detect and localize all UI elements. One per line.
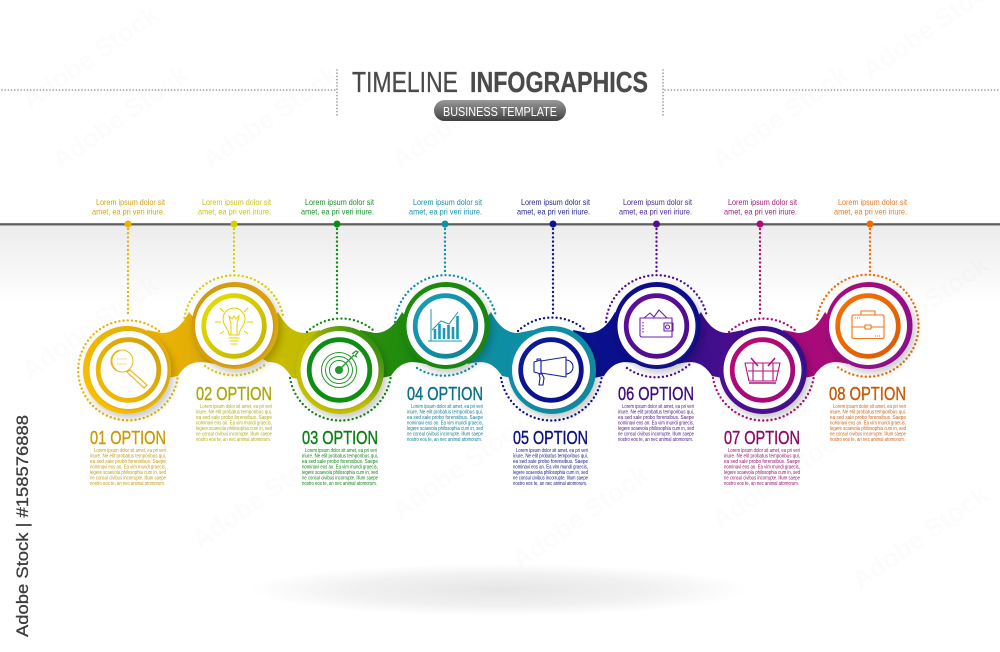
header: title block — [2, 67, 1000, 121]
top caption 02: amet, ea pri veri iriure. — [198, 206, 271, 216]
description 05: ne consul civibus incorrupte. Illum saepe — [513, 476, 588, 482]
top caption 02: Lorem ipsum dolor sit — [202, 197, 272, 207]
description 05: nostro eos te, an nec animal atomorum. — [513, 481, 587, 487]
title 03: 03 OPTION — [302, 428, 378, 448]
title 06: 06 OPTION — [618, 384, 694, 404]
description 07 — [724, 448, 800, 487]
timeline bar — [0, 223, 1000, 225]
step 01 — [78, 197, 178, 487]
title: INFOGRAPHICS — [470, 67, 648, 99]
top caption 07: Lorem ipsum dolor sit — [728, 197, 798, 207]
text: Adobe Stock — [186, 439, 334, 555]
description 03: legere scaevola philosophia cum in, sed — [302, 470, 378, 476]
top caption 06: amet, ea pri veri iriure. — [619, 206, 692, 216]
text: Adobe Stock — [386, 409, 534, 525]
description 06: nominavi eos an. Ea vim mundi graecis, — [618, 420, 694, 426]
icon: magnifier — [111, 350, 147, 388]
connector dots 04 — [395, 220, 496, 376]
description 08: nominavi eos an. Ea vim mundi graecis, — [830, 420, 906, 426]
step 05 — [501, 197, 602, 487]
description 07: ne consul civibus incorrupte. Illum saepe — [724, 476, 800, 482]
description 05: legere scaevola philosophia cum in, sed — [513, 470, 588, 476]
description 02: legere scaevola philosophia cum in, sed — [196, 426, 272, 432]
icon: briefcase — [852, 311, 884, 338]
disc 05 — [508, 326, 596, 414]
top caption 06: Lorem ipsum dolor sit — [623, 197, 693, 207]
icon: target — [322, 351, 358, 388]
connector dots 07 — [713, 220, 814, 421]
description 03: nostro eos te, an nec animal atomorum. — [302, 481, 377, 487]
top caption 03: Lorem ipsum dolor sit — [305, 197, 375, 207]
description 07: legere scaevola philosophia cum in, sed — [724, 470, 800, 476]
description 01: nostro eos te, an nec animal atomorum. — [90, 481, 165, 487]
description 04: iriure. Ne elit probatus temporibus qui, — [407, 410, 483, 416]
title: TIMELINE — [352, 67, 458, 99]
text: Adobe Stock — [16, 0, 164, 115]
disc 02 — [192, 282, 278, 369]
description 01: ne consul civibus incorrupte. Illum saepe — [90, 476, 166, 482]
connector dots 05 — [501, 220, 602, 421]
text: Adobe Stock — [196, 59, 344, 175]
text: Adobe Stock — [506, 459, 654, 575]
title 01: 01 OPTION — [90, 428, 166, 448]
description 07: ea sed sale probo forensibus. Saepe — [724, 459, 800, 465]
description 06: iriure. Ne elit probatus temporibus qui, — [618, 410, 694, 416]
top caption 07 — [724, 197, 798, 216]
description 03 — [302, 448, 378, 487]
step 06 — [606, 197, 707, 443]
description 01: iriure. Ne elit probatus temporibus qui, — [90, 454, 166, 460]
step 02 — [184, 197, 283, 443]
description 04: nominavi eos an. Ea vim mundi graecis, — [407, 420, 483, 426]
description 07: iriure. Ne elit probatus temporibus qui, — [724, 454, 800, 460]
disc 03 — [296, 326, 384, 414]
description 02: nostro eos te, an nec animal atomorum. — [196, 437, 271, 443]
description 03: Lorem ipsum dolor sit amet, ea pri veri — [305, 448, 377, 454]
step 07 — [713, 197, 814, 487]
description 02: nominavi eos an. Ea vim mundi graecis, — [196, 420, 272, 426]
description 08: legere scaevola philosophia cum in, sed — [830, 426, 906, 432]
top caption 07: amet, ea pri veri iriure. — [724, 206, 797, 216]
icon: light bulb — [215, 308, 253, 344]
description 01: ea sed sale probo forensibus. Saepe — [90, 459, 166, 465]
top caption 01 — [92, 197, 166, 216]
connector dots 01 — [78, 220, 178, 420]
text: Adobe Stock — [706, 419, 854, 535]
description 06: Lorem ipsum dolor sit amet, ea pri veri — [622, 404, 694, 410]
description 01 — [90, 448, 166, 487]
description 04: Lorem ipsum dolor sit amet, ea pri veri — [411, 404, 483, 410]
top caption 01: amet, ea pri veri iriure. — [92, 206, 165, 216]
text: Adobe Stock — [846, 249, 994, 365]
description 01: nominavi eos an. Ea vim mundi graecis, — [90, 464, 166, 470]
description 04 — [407, 404, 483, 443]
description 05: ea sed sale probo forensibus. Saepe — [513, 459, 588, 465]
description 05: Lorem ipsum dolor sit amet, ea pri veri — [516, 448, 588, 454]
title 02: 02 OPTION — [196, 384, 272, 404]
subtitle pill — [434, 100, 566, 121]
description 06 — [618, 404, 694, 443]
description 08: ne consul civibus incorrupte. Illum saepe — [830, 432, 906, 438]
icon: basket — [745, 358, 780, 383]
title 05: 05 OPTION — [513, 428, 588, 448]
description 02: Lorem ipsum dolor sit amet, ea pri veri — [200, 404, 272, 410]
description 08: ea sed sale probo forensibus. Saepe — [830, 415, 906, 421]
description 03: ea sed sale probo forensibus. Saepe — [302, 459, 378, 465]
description 08 — [830, 404, 906, 443]
description 06: legere scaevola philosophia cum in, sed — [618, 426, 694, 432]
description 02: ea sed sale probo forensibus. Saepe — [196, 415, 272, 421]
top caption 08 — [834, 197, 908, 216]
top caption 08: Lorem ipsum dolor sit — [838, 197, 908, 207]
top caption 06 — [619, 197, 693, 216]
description 05 — [513, 448, 588, 487]
background shading below timeline — [0, 225, 1000, 305]
text: Adobe Stock — [386, 59, 534, 175]
step 03 — [290, 197, 391, 487]
subtitle pill: BUSINESS TEMPLATE — [443, 104, 557, 119]
description 01: legere scaevola philosophia cum in, sed — [90, 470, 166, 476]
title 08: 08 OPTION — [829, 384, 906, 404]
description 06: ne consul civibus incorrupte. Illum saepe — [618, 432, 694, 438]
description 06: nostro eos te, an nec animal atomorum. — [618, 437, 693, 443]
text: Adobe Stock — [706, 59, 854, 175]
description 03: ne consul civibus incorrupte. Illum saepe — [302, 476, 378, 482]
icon: wallet — [640, 310, 673, 337]
top caption 04: amet, ea pri veri iriure. — [409, 206, 482, 216]
description 03: nominavi eos an. Ea vim mundi graecis, — [302, 464, 378, 470]
top caption 04: Lorem ipsum dolor sit — [413, 197, 483, 207]
description 05: nominavi eos an. Ea vim mundi graecis, — [513, 464, 588, 470]
disc 08 — [826, 282, 912, 369]
connector dots 03 — [290, 220, 391, 421]
text: Adobe Stock — [846, 479, 994, 595]
top caption 01: Lorem ipsum dolor sit — [96, 197, 166, 207]
description 04: ne consul civibus incorrupte. Illum saepe — [407, 432, 483, 438]
description 07: Lorem ipsum dolor sit amet, ea pri veri — [728, 448, 800, 454]
icon: bar chart — [428, 309, 462, 341]
description 03: iriure. Ne elit probatus temporibus qui, — [302, 454, 378, 460]
floor shadow — [250, 564, 750, 616]
step 04 — [395, 197, 496, 443]
top caption 08: amet, ea pri veri iriure. — [834, 206, 907, 216]
text: Adobe Stock — [16, 269, 164, 385]
step 08 — [817, 197, 919, 443]
connector dots 02 — [184, 220, 283, 375]
description 02: ne consul civibus incorrupte. Illum saepe — [196, 432, 272, 438]
top caption 03: amet, ea pri veri iriure. — [301, 206, 374, 216]
top caption 04 — [409, 197, 483, 216]
title 04: 04 OPTION — [407, 384, 483, 404]
disc 01 — [83, 326, 171, 414]
disc 04 — [402, 282, 490, 369]
description 07: nostro eos te, an nec animal atomorum. — [724, 481, 799, 487]
description 01: Lorem ipsum dolor sit amet, ea pri veri — [94, 448, 166, 454]
connector dots 08 — [817, 220, 919, 377]
description 06: ea sed sale probo forensibus. Saepe — [618, 415, 694, 421]
description 04: ea sed sale probo forensibus. Saepe — [407, 415, 483, 421]
description 08: Lorem ipsum dolor sit amet, ea pri veri — [833, 404, 906, 410]
text: Adobe Stock — [46, 59, 194, 175]
top caption 05: amet, ea pri veri iriure. — [517, 206, 590, 216]
description 02 — [196, 404, 272, 443]
description 02: iriure. Ne elit probatus temporibus qui, — [196, 410, 272, 416]
connector dots 06 — [606, 220, 707, 377]
description 05: iriure. Ne elit probatus temporibus qui, — [513, 454, 588, 460]
description 08: nostro eos te, an nec animal atomorum. — [830, 437, 905, 443]
stock credit: Adobe Stock | #158576888 — [13, 415, 32, 637]
top caption 02 — [198, 197, 272, 216]
description 04: legere scaevola philosophia cum in, sed — [407, 426, 483, 432]
disc 06 — [614, 282, 700, 369]
disc 07 — [719, 326, 807, 414]
top caption 05 — [517, 197, 591, 216]
description 08: iriure. Ne elit probatus temporibus qui, — [830, 410, 906, 416]
top caption 03 — [301, 197, 375, 216]
description 04: nostro eos te, an nec animal atomorum. — [407, 437, 482, 443]
title 07: 07 OPTION — [724, 428, 800, 448]
icon: megaphone — [534, 357, 573, 385]
description 07: nominavi eos an. Ea vim mundi graecis, — [724, 464, 800, 470]
connector bands — [147, 312, 855, 380]
top caption 05: Lorem ipsum dolor sit — [521, 197, 591, 207]
